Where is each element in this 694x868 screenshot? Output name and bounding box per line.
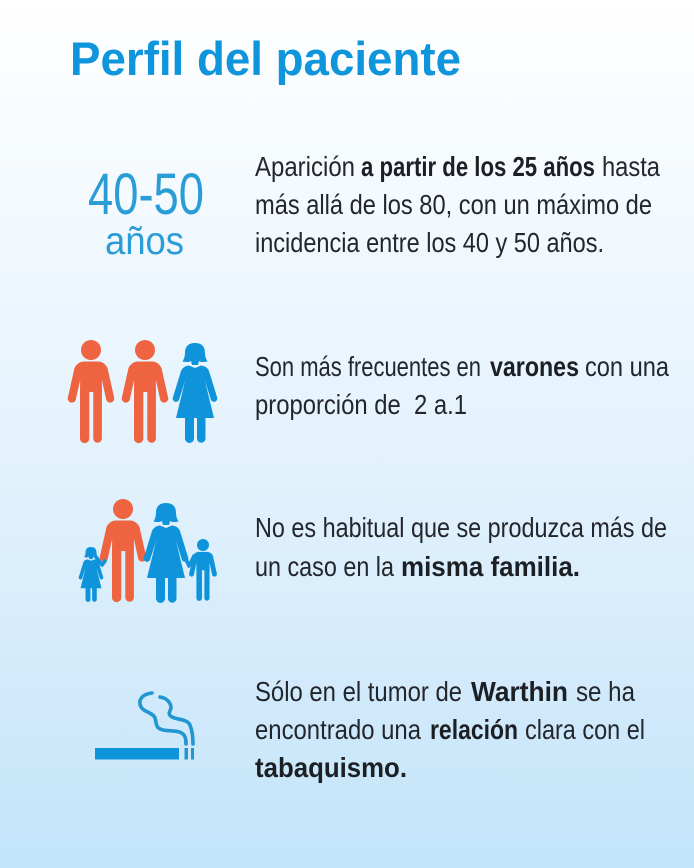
sex ratio description: proporción de 2 a.1 (255, 389, 467, 420)
smoking description: Sólo en el tumor de (255, 676, 462, 707)
smoking description (255, 676, 645, 783)
smoking description: relación (430, 714, 518, 745)
age description: hasta (602, 151, 661, 182)
title: Perfil del paciente (70, 32, 461, 85)
age stat: 40-50 (88, 162, 204, 227)
icon: two men and one woman (68, 340, 217, 443)
sex ratio description: Son más frecuentes en (255, 351, 481, 382)
family description: un caso en la (255, 551, 395, 582)
panel: sex ratio (68, 340, 670, 443)
smoking description: clara con el (525, 714, 645, 745)
family description (255, 512, 667, 582)
smoking description: encontrado una (255, 714, 422, 745)
sex ratio description: con una (585, 351, 670, 382)
smoking description: tabaquismo. (255, 752, 407, 783)
age description: a partir de los 25 años (361, 151, 595, 182)
panel: family (79, 499, 667, 603)
age stat: años (105, 220, 184, 263)
panel: age (88, 151, 661, 263)
icon: family (79, 499, 217, 603)
panel: smoking (95, 676, 645, 783)
icon: cigarette (95, 693, 194, 760)
age stat (88, 162, 204, 263)
family description: misma familia. (401, 551, 580, 582)
age description (255, 151, 661, 258)
age description: Aparición (255, 151, 355, 182)
sex ratio description: varones (490, 351, 579, 382)
sex ratio description (255, 351, 670, 420)
smoking description: Warthin (471, 676, 568, 707)
age description: incidencia entre los 40 y 50 años. (255, 227, 604, 258)
smoking description: se ha (576, 676, 636, 707)
